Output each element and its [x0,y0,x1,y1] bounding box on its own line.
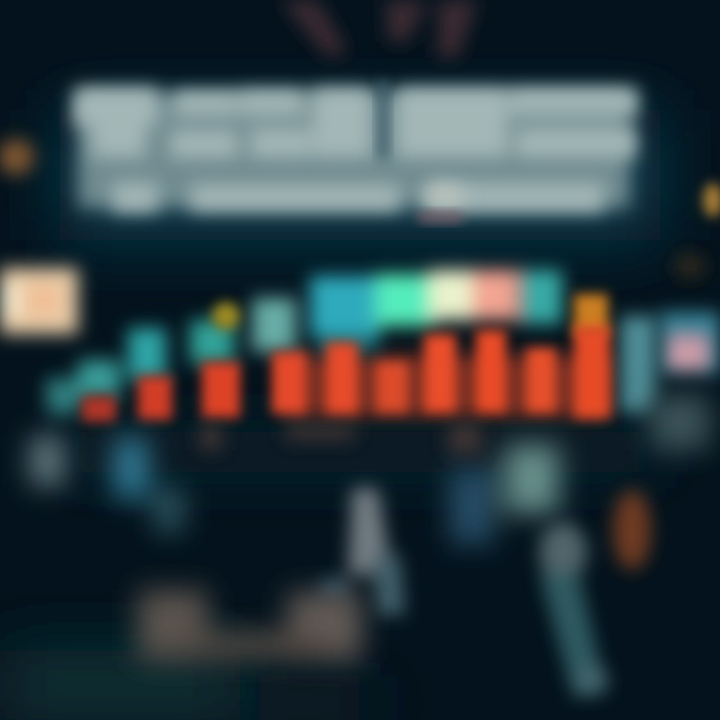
title line one [74,88,638,158]
bar stem reflections [200,424,482,454]
chart teal upper bars [46,270,656,414]
background glow [0,110,660,720]
tan foreground shape [138,590,362,660]
right orange light [703,183,720,217]
orange bar top [574,294,608,336]
right dim light [675,254,705,278]
title bright spot [425,184,465,208]
lower teal reflections [30,395,710,544]
right screen [660,312,720,374]
left bright screen [0,268,78,334]
title centre gap [378,80,388,158]
dark red band behind bars [285,355,610,417]
title block [74,80,638,222]
top rafters [280,0,478,58]
left orange light [0,139,34,175]
title haze [78,92,630,208]
olive marker [212,302,240,330]
audience highlights [320,488,651,698]
chart red lower bars [82,326,610,422]
title lower pink edge [418,212,462,222]
title line two [112,182,604,212]
